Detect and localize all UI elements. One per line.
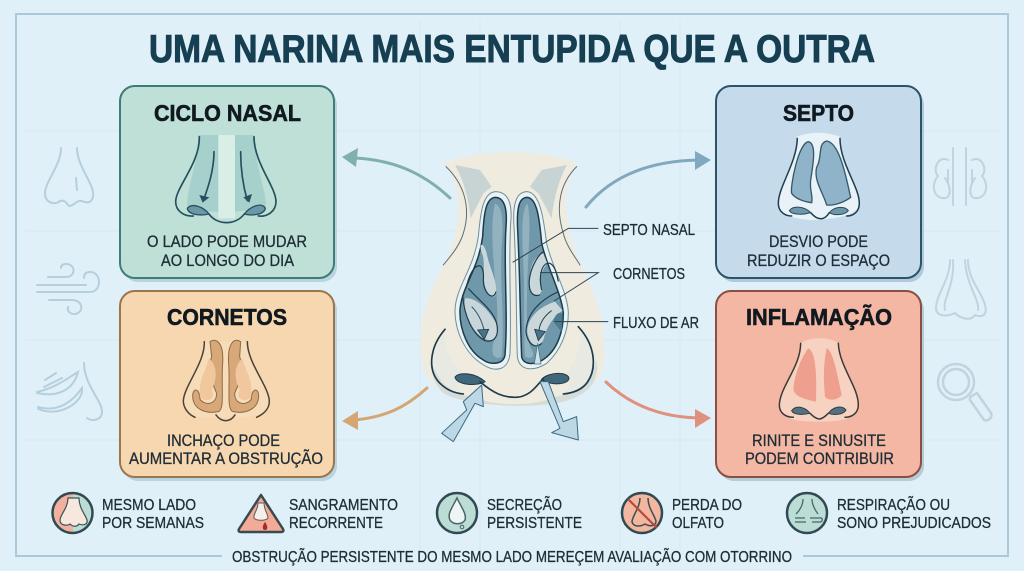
icon: crossed nose [622,493,662,533]
warning: secreção: PERSISTENTE [487,515,582,532]
arrow: to inflamação [606,382,711,428]
central nose diagram [420,152,608,442]
warning: respiração: SONO PREJUDICADOS [837,515,991,532]
warning: sangramento: SANGRAMENTO [289,497,398,514]
icon: swollen turbinates [183,340,269,421]
heading: septo: SEPTO [783,100,854,126]
heading: inflamação: INFLAMAÇÃO [746,303,892,330]
warning: mesmo lado [52,493,204,533]
text: inflamação [745,431,894,468]
warning: secreção: SECREÇÃO [487,494,562,514]
arrow: to ciclo nasal [342,148,450,198]
text: inflamação: RINITE E SINUSITE [752,431,886,450]
arrow: to septo [586,151,711,207]
panel: inflamação [716,291,924,481]
text: cornetos: INCHAÇO PODE [167,431,280,450]
title: UMA NARINA MAIS ENTUPIDA QUE A OUTRA [149,28,875,71]
background icon: wind [37,264,99,314]
label: fluxo de ar: FLUXO DE AR [613,315,699,332]
nose exterior [420,152,604,406]
icon: deviated septum [778,133,859,220]
text: cornetos [129,431,323,468]
warning: perda do olfato: PERDA DO [672,497,742,514]
text: cornetos: AUMENTAR A OBSTRUÇÃO [129,449,323,468]
background icon: nose right [936,260,986,319]
footer note: OBSTRUÇÃO PERSISTENTE DO MESMO LADO MEREÇEM AVALIAÇÃO COM OTORRINO [232,549,792,566]
icon: nose with airflow [176,135,276,223]
text: septo: REDUZIR O ESPAÇO [747,251,890,270]
heading: cornetos: CORNETOS [167,304,287,330]
icon: warning triangle [239,495,283,532]
warning: mesmo lado: MESMO LADO [102,497,196,514]
background icon: magnifier [938,364,991,421]
warning: respiração: RESPIRAÇÃO OU [837,494,950,514]
warning: mesmo lado: POR SEMANAS [102,515,204,532]
warning: secreção [437,493,582,533]
icon: half nose [52,493,93,533]
background icon: turbinates [37,363,102,420]
panel: septo [716,86,924,282]
text: septo: DESVIO PODE [769,232,868,251]
panel: ciclo nasal [120,86,337,282]
arrow: to cornetos [342,388,427,430]
nasal chambers [455,192,568,369]
text: ciclo nasal [147,232,307,270]
warning: perda do olfato: OLFATO [672,515,724,532]
warning: respiração [787,493,991,533]
label: septo nasal: SEPTO NASAL [603,222,695,239]
text: ciclo nasal: O LADO PODE MUDAR [147,232,307,251]
background icon: sinus right [934,148,986,205]
nose base and arrows [432,228,608,442]
warning: sangramento: RECORRENTE [289,515,383,532]
icon: inflamed nose [779,338,858,422]
text: ciclo nasal: AO LONGO DO DIA [161,251,295,270]
text: septo [747,232,890,270]
heading: ciclo nasal: CICLO NASAL [154,100,301,126]
label: cornetos: CORNETOS [613,266,685,283]
text: inflamação: PODEM CONTRIBUIR [745,449,894,468]
icon: droplet [437,493,477,533]
icon: breathing [787,493,827,533]
panel: cornetos [120,291,337,481]
warning: perda do olfato [622,493,742,533]
background icon: nose left [45,148,93,206]
warning: sangramento [239,495,398,532]
